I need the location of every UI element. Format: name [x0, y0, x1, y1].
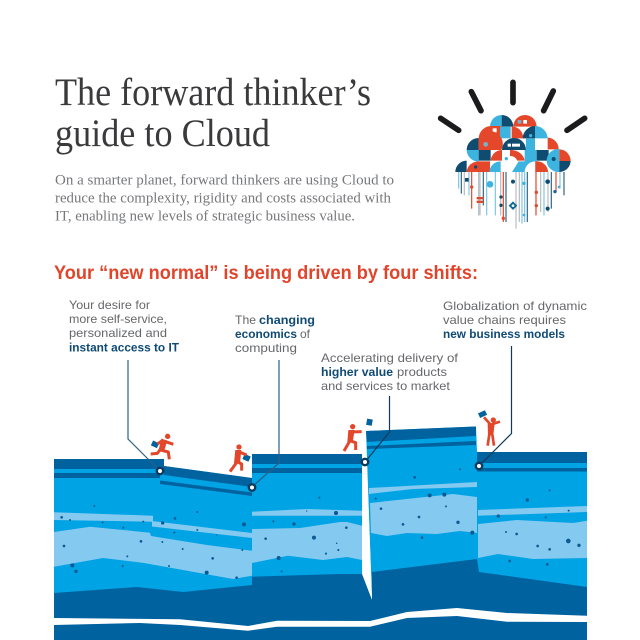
leader line 3	[365, 396, 390, 462]
title: guide to Cloud	[55, 112, 270, 155]
icon: figure pushing box	[230, 444, 251, 472]
icon: rays	[441, 82, 585, 130]
strata: light layers	[54, 482, 587, 579]
text block: economics: computing	[235, 341, 297, 355]
marker 1	[157, 468, 163, 474]
icon: figure throwing box	[344, 419, 373, 451]
icon: drips	[459, 172, 564, 229]
strata: top bands	[54, 426, 587, 496]
text block: globalization: new business models	[443, 327, 565, 341]
text block: globalization: Globalization of dynamic	[443, 299, 587, 313]
text block: globalization: value chains requires	[443, 313, 566, 327]
marker 4	[476, 463, 482, 469]
text block: self-service: instant access to IT	[69, 340, 180, 354]
text block: economics: The	[235, 313, 256, 327]
text block: self-service: more self-service,	[69, 312, 167, 326]
text block: higher value: and services to market	[321, 379, 451, 393]
text block: economics: of	[300, 327, 311, 341]
text block: self-service: Your desire for	[69, 298, 150, 312]
text block: higher value	[321, 351, 459, 393]
intro text	[55, 172, 394, 224]
icon: cloud domes	[455, 115, 571, 172]
strata: white fracture line	[54, 608, 587, 631]
text block: economics: changing	[259, 313, 315, 327]
strata: base rock	[54, 426, 587, 640]
icon: running figure	[151, 434, 173, 459]
heading: four shifts: Your “new normal” is being driven by four shifts:	[54, 263, 478, 284]
strata: mineral dots left	[60, 497, 339, 579]
strata: mineral dots right	[325, 468, 581, 566]
text block: higher value: higher value	[321, 365, 393, 379]
marker 2	[249, 484, 255, 491]
leader line 1	[128, 360, 160, 471]
icon: drip nodes	[465, 178, 560, 220]
text block: economics: economics	[235, 327, 297, 341]
intro text: On a smarter planet, forward thinkers are using Cloud to	[55, 172, 394, 188]
panel: geological strata	[54, 426, 587, 640]
title: The forward thinker’s	[55, 71, 371, 114]
leader line 2	[252, 360, 279, 487]
marker 3	[362, 459, 368, 465]
icon: figure with raised box	[478, 410, 500, 446]
text block: self-service: personalized and	[69, 326, 167, 340]
text block: self-service	[69, 298, 180, 354]
leader line 4	[479, 346, 512, 466]
intro text: IT, enabling new levels of strategic business value.	[55, 208, 355, 224]
text block: globalization	[443, 299, 587, 341]
icon: IBM smarter planet cloud logo	[441, 82, 585, 229]
text block: higher value: Accelerating delivery of	[321, 351, 459, 365]
title	[55, 71, 371, 155]
intro text: reduce the complexity, rigidity and costs associated with	[55, 190, 392, 206]
text block: economics	[235, 313, 315, 355]
text block: higher value: products	[397, 365, 447, 379]
